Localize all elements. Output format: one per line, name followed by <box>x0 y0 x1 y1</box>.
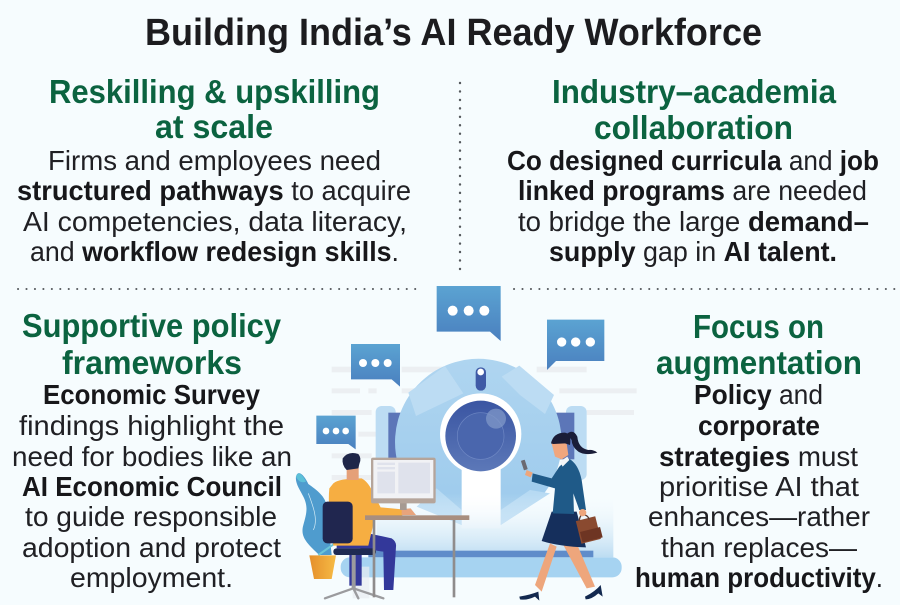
text block: reskilling body: structured pathways to acquire <box>17 175 411 206</box>
panel: supportive policy frameworks <box>12 307 292 593</box>
text block: collaboration body: linked programs are needed <box>518 175 867 206</box>
text block: augmentation body: enhances—rather <box>648 501 870 532</box>
side panels <box>376 406 587 480</box>
text block: reskilling body <box>17 145 411 267</box>
floor and base <box>341 493 622 577</box>
heading: focus on augmentation <box>656 308 862 381</box>
panel: reskilling and upskilling <box>17 73 411 267</box>
icon: speech bubble left <box>351 344 400 387</box>
illustration: AI workplace scene <box>296 286 637 601</box>
icon: speech bubble top <box>437 286 501 341</box>
text block: reskilling body: Firms and employees need <box>48 145 381 176</box>
text block: policy body: need for bodies like an <box>12 441 292 472</box>
text block: reskilling body: and workflow redesign skills. <box>30 236 399 267</box>
title: Building India’s AI Ready Workforce <box>145 12 762 54</box>
text block: policy body: AI Economic Council <box>22 471 282 502</box>
heading: reskilling and upskilling: at scale <box>155 108 273 145</box>
text block: augmentation body: human productivity. <box>635 562 883 593</box>
icon: speech bubble right <box>547 320 604 370</box>
text block: policy body: Economic Survey <box>43 379 260 410</box>
text block: policy body <box>12 379 292 593</box>
text block: augmentation body: corporate <box>698 410 820 441</box>
text block: augmentation body: Policy and <box>694 379 823 410</box>
panel: focus on augmentation <box>635 308 883 593</box>
text block: augmentation body <box>635 379 883 593</box>
heading: reskilling and upskilling: Reskilling & upskilling <box>49 73 380 110</box>
panel: industry academia collaboration <box>507 73 879 267</box>
text block: collaboration body: supply gap in AI talent. <box>549 236 837 267</box>
text block: augmentation body: than replaces— <box>661 532 857 563</box>
heading: reskilling and upskilling <box>49 73 380 145</box>
text block: reskilling body: AI competencies, data literacy, <box>23 206 407 237</box>
icon: speech bubble small <box>316 416 356 449</box>
illustration: desk and monitor <box>365 458 469 597</box>
heading: industry academia collaboration: collaboration <box>594 109 793 146</box>
heading: supportive policy frameworks: Supportive policy <box>22 307 282 344</box>
text block: collaboration body: to bridge the large demand– <box>518 206 869 237</box>
illustration: man at desk <box>323 453 416 598</box>
text block: policy body: adoption and protect <box>22 532 281 563</box>
illustration: woman walking <box>519 432 603 601</box>
heading: industry academia collaboration: Industry–academia <box>552 73 837 110</box>
heading: industry academia collaboration <box>552 73 837 146</box>
scanner disk <box>395 359 562 528</box>
heading: supportive policy frameworks: frameworks <box>62 344 242 381</box>
text block: collaboration body <box>507 145 879 267</box>
heading: focus on augmentation: Focus on <box>693 308 824 345</box>
heading: supportive policy frameworks <box>22 307 282 381</box>
icon: plant <box>296 473 336 579</box>
text block: policy body: findings highlight the <box>19 410 284 441</box>
text block: augmentation body: prioritise AI that <box>659 471 859 502</box>
text block: policy body: employment. <box>70 562 233 593</box>
heading: focus on augmentation: augmentation <box>656 344 862 381</box>
text block: augmentation body: strategies must <box>659 441 858 472</box>
text block: policy body: to guide responsible <box>25 501 277 532</box>
text block: collaboration body: Co designed curricula and job <box>507 145 879 176</box>
